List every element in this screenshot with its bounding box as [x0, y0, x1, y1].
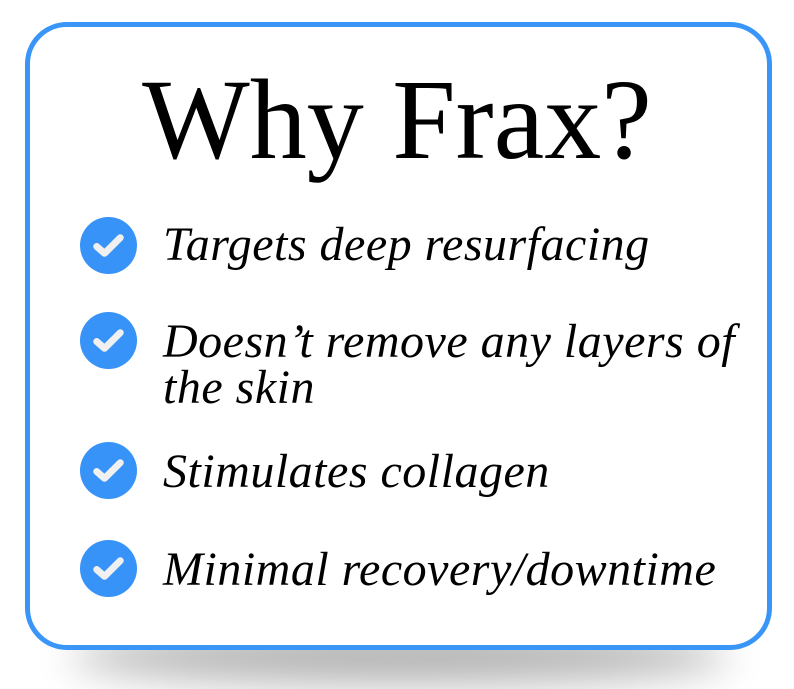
icon: check [80, 312, 137, 369]
title: Why Frax? [142, 56, 652, 183]
text: Targets deep resurfacing [163, 218, 650, 271]
icon: check [80, 217, 137, 274]
item: recovery [80, 540, 716, 597]
text: Minimal recovery/downtime [163, 543, 716, 596]
text: Stimulates collagen [163, 445, 550, 498]
item: layers [80, 312, 740, 414]
text: Doesn’t remove any layers of [163, 315, 735, 368]
icon: check [80, 540, 137, 597]
text: the skin [163, 361, 315, 414]
item: collagen [80, 442, 550, 499]
item: targets [80, 217, 650, 274]
icon: check [80, 442, 137, 499]
